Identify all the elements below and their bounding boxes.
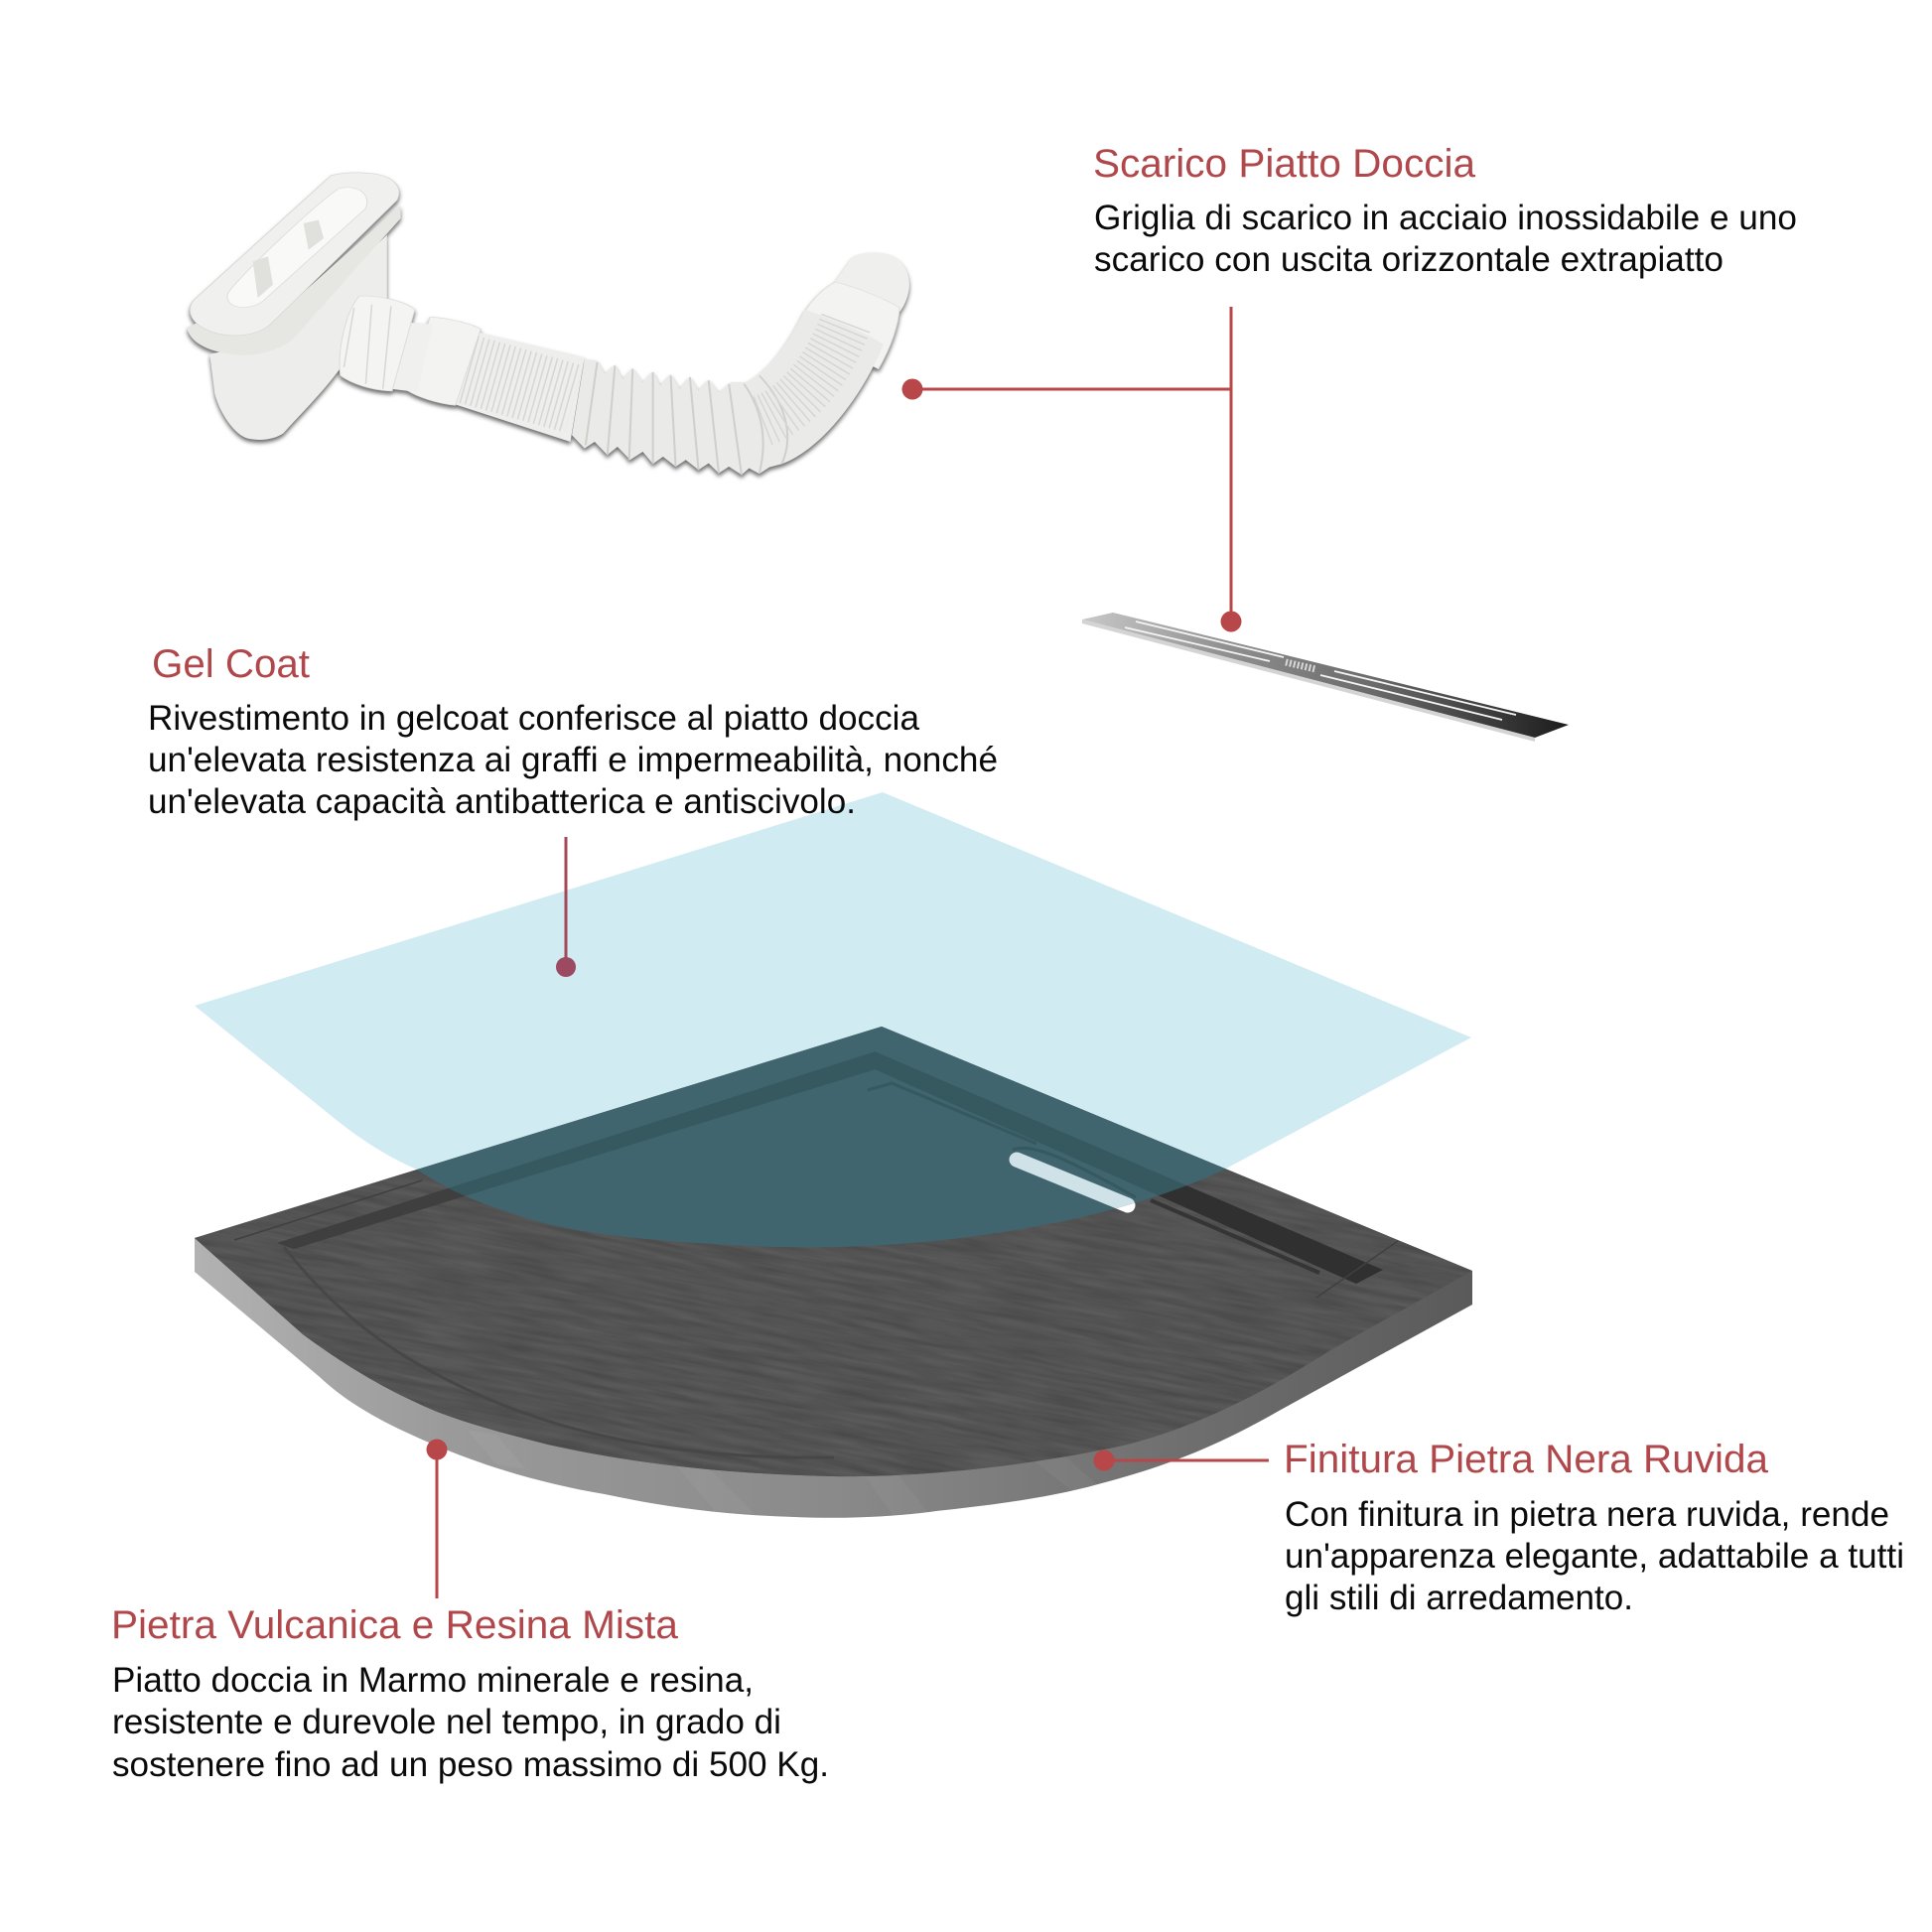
right drain channel (875, 1051, 1383, 1284)
icon: flexible drain pipe with trap (187, 173, 909, 475)
corner seam lines (234, 1180, 1398, 1298)
text block: Scarico Piatto Doccia: scarico con uscita orizzontale extrapiatto (1094, 240, 1724, 279)
drain slot opening (1017, 1160, 1128, 1205)
left drain channel (277, 1051, 876, 1249)
text block: Gel Coat: un'elevata capacità antibatterica e antiscivolo. (148, 782, 856, 821)
text block: Pietra Vulcanica e Resina Mista: resistente e durevole nel tempo, in grado di (112, 1703, 781, 1741)
connector cylinder (382, 321, 433, 392)
blue gel coat sheet (195, 792, 1471, 1247)
leader: gel coat callout (556, 837, 576, 977)
text block: Finitura Pietra Nera Ruvida (1284, 1438, 1904, 1617)
text block: Finitura Pietra Nera Ruvida: Con finitura in pietra nera ruvida, rende (1285, 1495, 1889, 1534)
tinted inner groove (868, 1083, 1036, 1144)
grate perforated centre (1286, 662, 1315, 669)
top flange plate (190, 173, 399, 336)
text block: Finitura Pietra Nera Ruvida: gli stili di arredamento. (1285, 1579, 1633, 1617)
shower tray (195, 1027, 1472, 1518)
recess ribs (253, 220, 324, 298)
leader: finish callout (1094, 1449, 1269, 1471)
side edge facets (467, 1430, 1097, 1516)
text block: Pietra Vulcanica e Resina Mista: sostenere fino ad un peso massimo di 500 Kg. (112, 1745, 829, 1784)
tray top surface (195, 1027, 1472, 1476)
text block: Finitura Pietra Nera Ruvida: un'apparenza elegante, adattabile a tutti (1285, 1537, 1904, 1576)
text block: Gel Coat: Rivestimento in gelcoat conferisce al piatto doccia (148, 699, 920, 738)
tinted slot surround (1013, 1148, 1136, 1197)
overlap of sheet and tray (417, 1027, 1225, 1247)
text block: Scarico Piatto Doccia: Scarico Piatto Doccia (1093, 142, 1476, 186)
flexible bellows section (572, 310, 884, 475)
text block: Gel Coat: un'elevata resistenza ai graffi e impermeabilità, nonché (148, 741, 998, 779)
leader: drain callout (901, 307, 1241, 631)
bellows fold shading (586, 362, 787, 475)
text block: Gel Coat: Gel Coat (152, 642, 310, 686)
text block: Gel Coat (148, 642, 998, 821)
text block: Scarico Piatto Doccia (1093, 142, 1797, 279)
text block: Pietra Vulcanica e Resina Mista (111, 1603, 829, 1784)
straight ribbed hose (453, 331, 585, 442)
slate texture (195, 1027, 1472, 1477)
perimeter groove (284, 1247, 834, 1457)
grate slots (1125, 621, 1516, 720)
hose collar (407, 317, 481, 405)
pipe outlet sleeve (797, 282, 899, 369)
elbow fine ribs (762, 323, 846, 421)
text block: Pietra Vulcanica e Resina Mista: Pietra Vulcanica e Resina Mista (111, 1603, 679, 1647)
trap body (209, 235, 387, 440)
lower flange (187, 206, 401, 355)
text block: Pietra Vulcanica e Resina Mista: Piatto doccia in Marmo minerale e resina, (112, 1661, 754, 1700)
tinted slot (1017, 1160, 1128, 1205)
union nut (340, 296, 415, 391)
right groove (1151, 1200, 1319, 1273)
nut ribs (344, 305, 391, 389)
tinted channels (449, 1051, 1185, 1195)
text block: Scarico Piatto Doccia: Griglia di scarico in acciaio inossidabile e uno (1094, 199, 1797, 237)
pipe end tube (833, 252, 909, 320)
flange recess (227, 188, 367, 308)
icon: stainless steel drain grate (1082, 613, 1569, 742)
leader: resin callout (427, 1440, 447, 1598)
text block: Finitura Pietra Nera Ruvida: Finitura Pietra Nera Ruvida (1284, 1438, 1769, 1481)
tray side edge (195, 1238, 1472, 1518)
hose fine ribs (469, 369, 574, 399)
